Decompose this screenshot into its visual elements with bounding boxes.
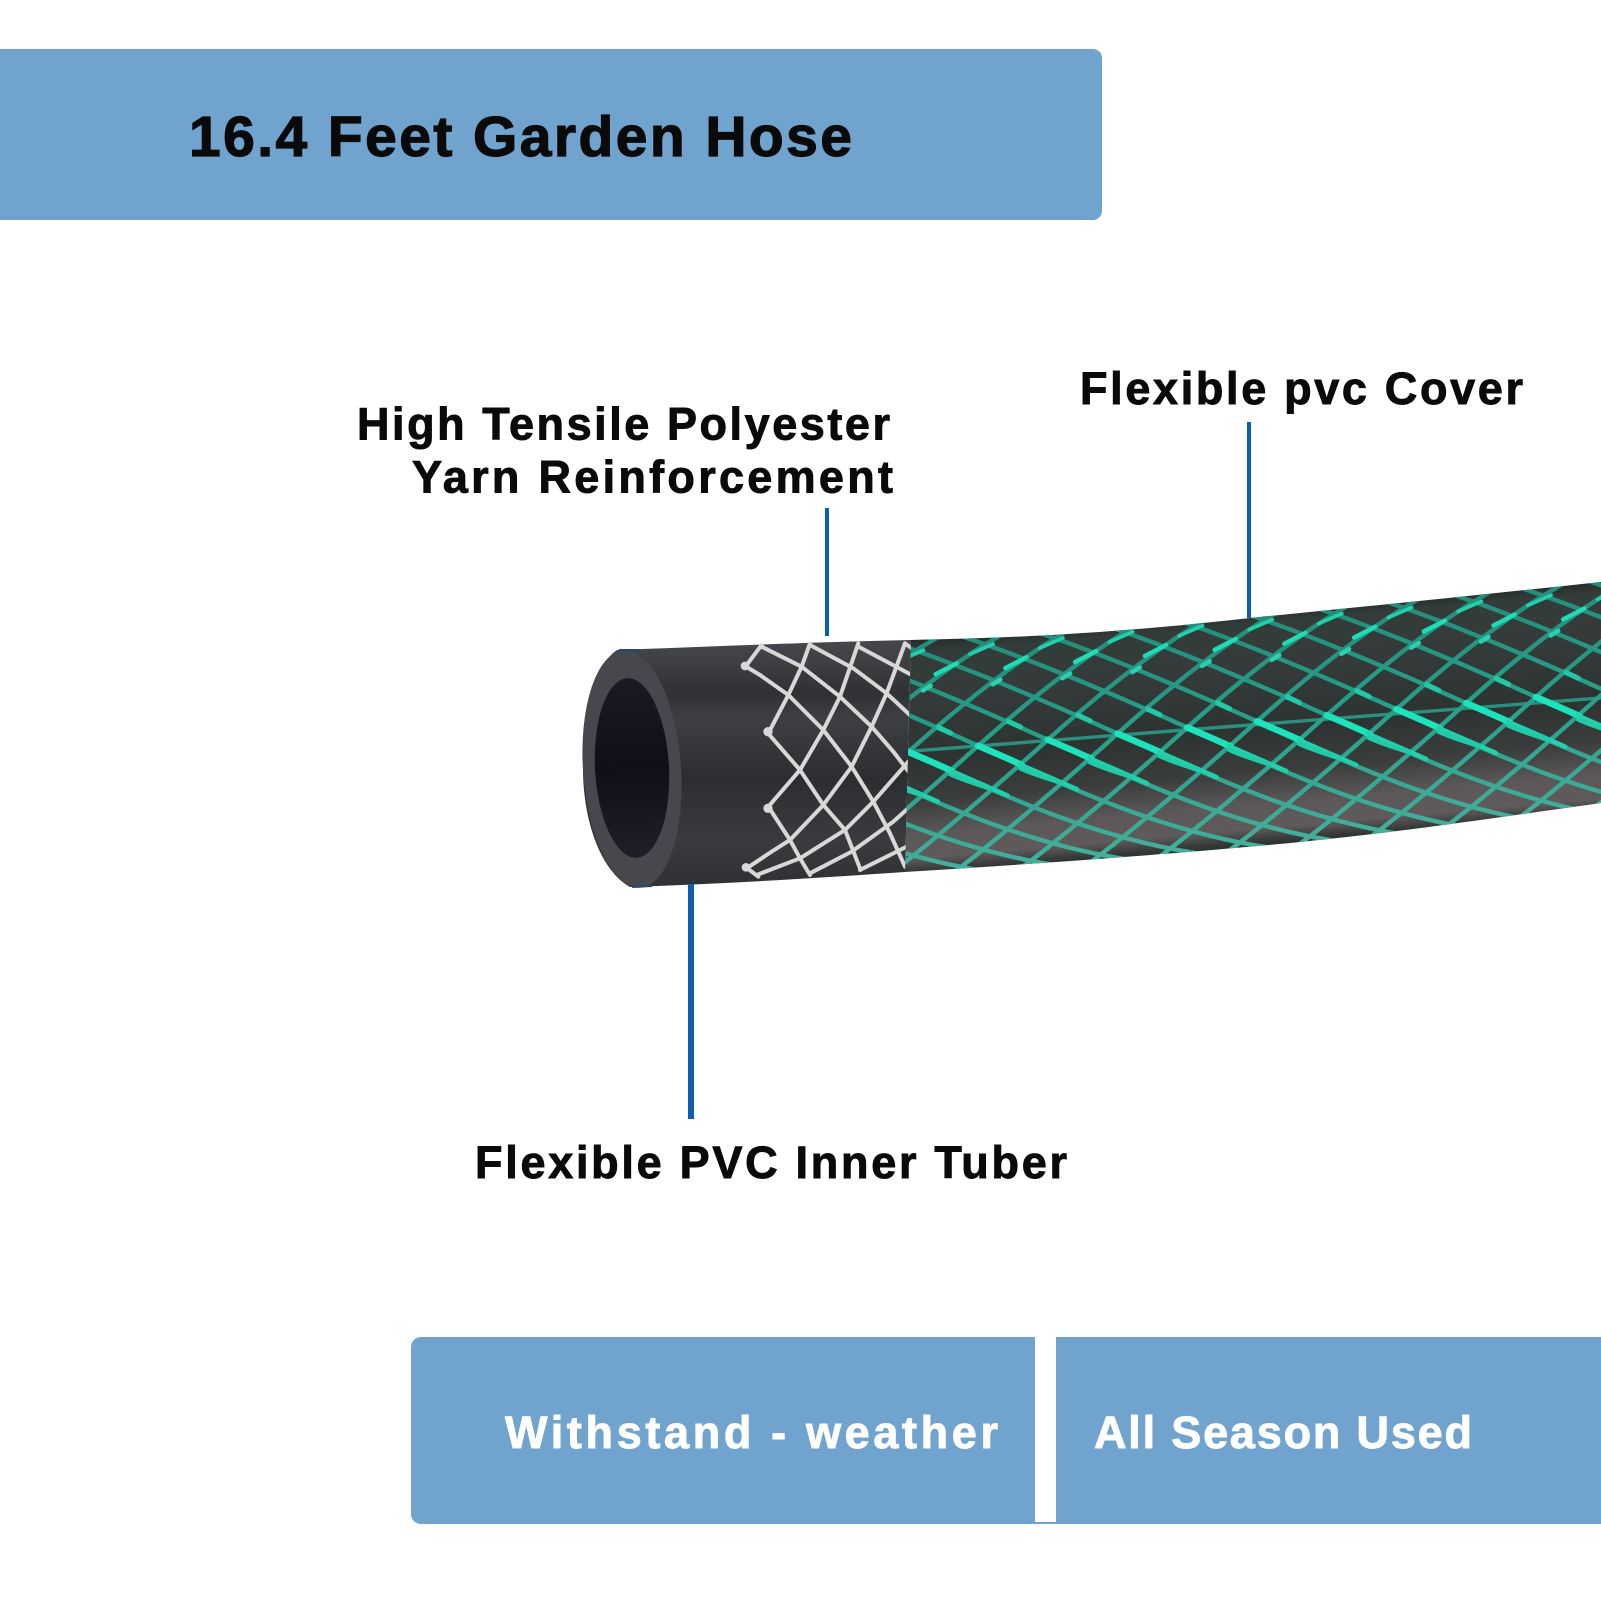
hose end face (575, 647, 689, 891)
feature bar (411, 1337, 1601, 1524)
callout line: inner tube (688, 884, 694, 1119)
label: high tensile polyester yarn reinforcement: High Tensile Polyester (357, 398, 890, 450)
white polyester yarn reinforcement (741, 643, 912, 877)
bar background (411, 1337, 1601, 1524)
title banner (0, 49, 1102, 220)
callout line: pvc cover (1247, 422, 1251, 618)
hose bore opening (590, 676, 674, 860)
feature: all season used: All Season Used (1094, 1407, 1472, 1458)
label: high tensile polyester yarn reinforcement: Yarn Reinforcement (412, 452, 893, 502)
feature: withstand weather: Withstand - weather (505, 1407, 998, 1458)
blue edge tints (619, 650, 652, 887)
label: flexible pvc inner tuber: Flexible PVC Inner Tuber (475, 1137, 1067, 1188)
callout line: yarn reinforcement (825, 508, 829, 636)
inner tube body (583, 640, 911, 887)
label: flexible pvc cover: Flexible pvc Cover (1080, 363, 1523, 414)
title text: 16.4 Feet Garden Hose (189, 105, 852, 169)
hose illustration (582, 582, 1601, 888)
label: high tensile polyester yarn reinforcement (357, 398, 893, 502)
bar divider (1035, 1337, 1056, 1522)
green braided pvc cover (905, 582, 1601, 872)
